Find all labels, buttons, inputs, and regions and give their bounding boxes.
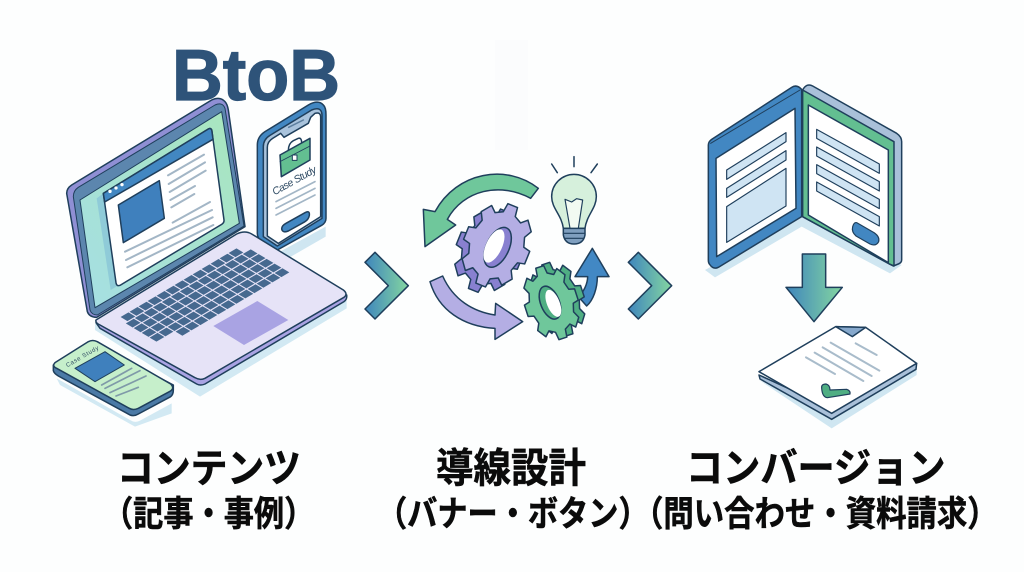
text: Case Study on phone: Case Study [271, 164, 319, 198]
text: Case Study on card: Case Study [65, 346, 100, 369]
icon: lightbulb [552, 157, 597, 244]
arrow: down gradient [786, 254, 842, 322]
icon: request document [759, 327, 917, 428]
form button [852, 223, 879, 245]
icon: green gear [515, 255, 594, 347]
check mark [822, 384, 850, 398]
arrow: green cycle [423, 174, 538, 247]
arrow: purple cycle [430, 276, 523, 339]
icon: small phone with case study [53, 340, 173, 427]
arrow: chevron right [628, 252, 672, 319]
heading: BtoB: BtoB [172, 36, 340, 116]
contents title: コンテンツ [117, 447, 301, 491]
label: conversion [633, 447, 998, 533]
touchpad [213, 301, 288, 345]
browser window [103, 129, 224, 286]
panel: flow design [365, 157, 672, 347]
arrow: chevron left [365, 252, 408, 319]
icon: purple gear [443, 193, 543, 303]
image placeholder [118, 181, 164, 243]
icon: tablet phone behind laptop [257, 102, 326, 260]
conversion subtitle: （問い合わせ・資料請求） [633, 494, 998, 533]
keyboard [121, 246, 287, 344]
flow design title: 導線設計 [436, 447, 586, 491]
label: contents [103, 447, 314, 533]
laptop lid [67, 98, 245, 317]
icon: green briefcase [280, 138, 310, 177]
panel: content devices [53, 98, 347, 427]
laptop base [96, 295, 347, 385]
icon: open brochure [708, 85, 902, 268]
panel: conversion [705, 85, 917, 428]
shadow under laptop [95, 300, 347, 397]
conversion title: コンバージョン [686, 447, 946, 491]
laptop screen [80, 112, 239, 308]
flow design subtitle: （バナー・ボタン） [377, 494, 649, 533]
icon: laptop [67, 98, 347, 385]
book shadow [705, 217, 902, 277]
arrow: blue up [575, 248, 609, 306]
contents subtitle: （記事・事例） [103, 494, 314, 533]
icon: phone button [282, 212, 309, 232]
label: flow design [377, 447, 649, 533]
